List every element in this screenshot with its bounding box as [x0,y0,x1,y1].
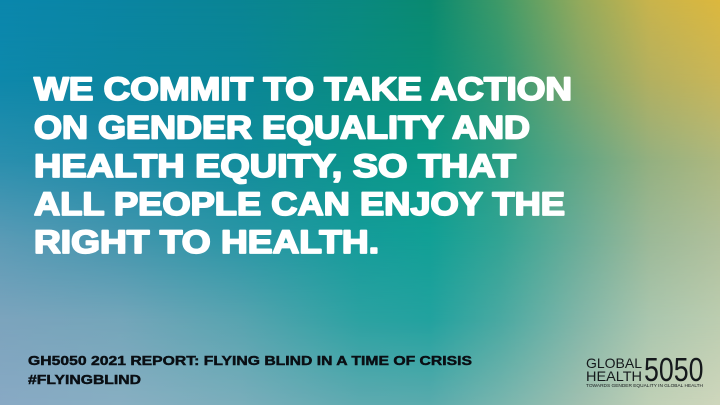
report citation and hashtag: GH5050 2021 REPORT: FLYING BLIND IN A TIME OF CRISIS [28,353,472,368]
logo: Global Health 5050: GLOBAL [586,355,642,371]
headline statement [34,71,572,260]
logo: Global Health 5050 [586,351,704,388]
headline statement: HEALTH EQUITY, SO THAT [34,148,517,184]
headline statement: RIGHT TO HEALTH. [34,224,379,260]
report citation and hashtag: #FLYINGBLIND [28,372,141,387]
logo: Global Health 5050: 5050 [644,351,704,388]
headline statement: WE COMMIT TO TAKE ACTION [34,71,572,107]
report citation and hashtag [28,353,472,387]
logo: Global Health 5050: TOWARDS GENDER EQUALITY IN GLOBAL HEALTH [586,383,703,388]
headline statement: ON GENDER EQUALITY AND [34,110,530,146]
logo: Global Health 5050: HEALTH [586,368,642,384]
headline statement: ALL PEOPLE CAN ENJOY THE [34,186,565,222]
